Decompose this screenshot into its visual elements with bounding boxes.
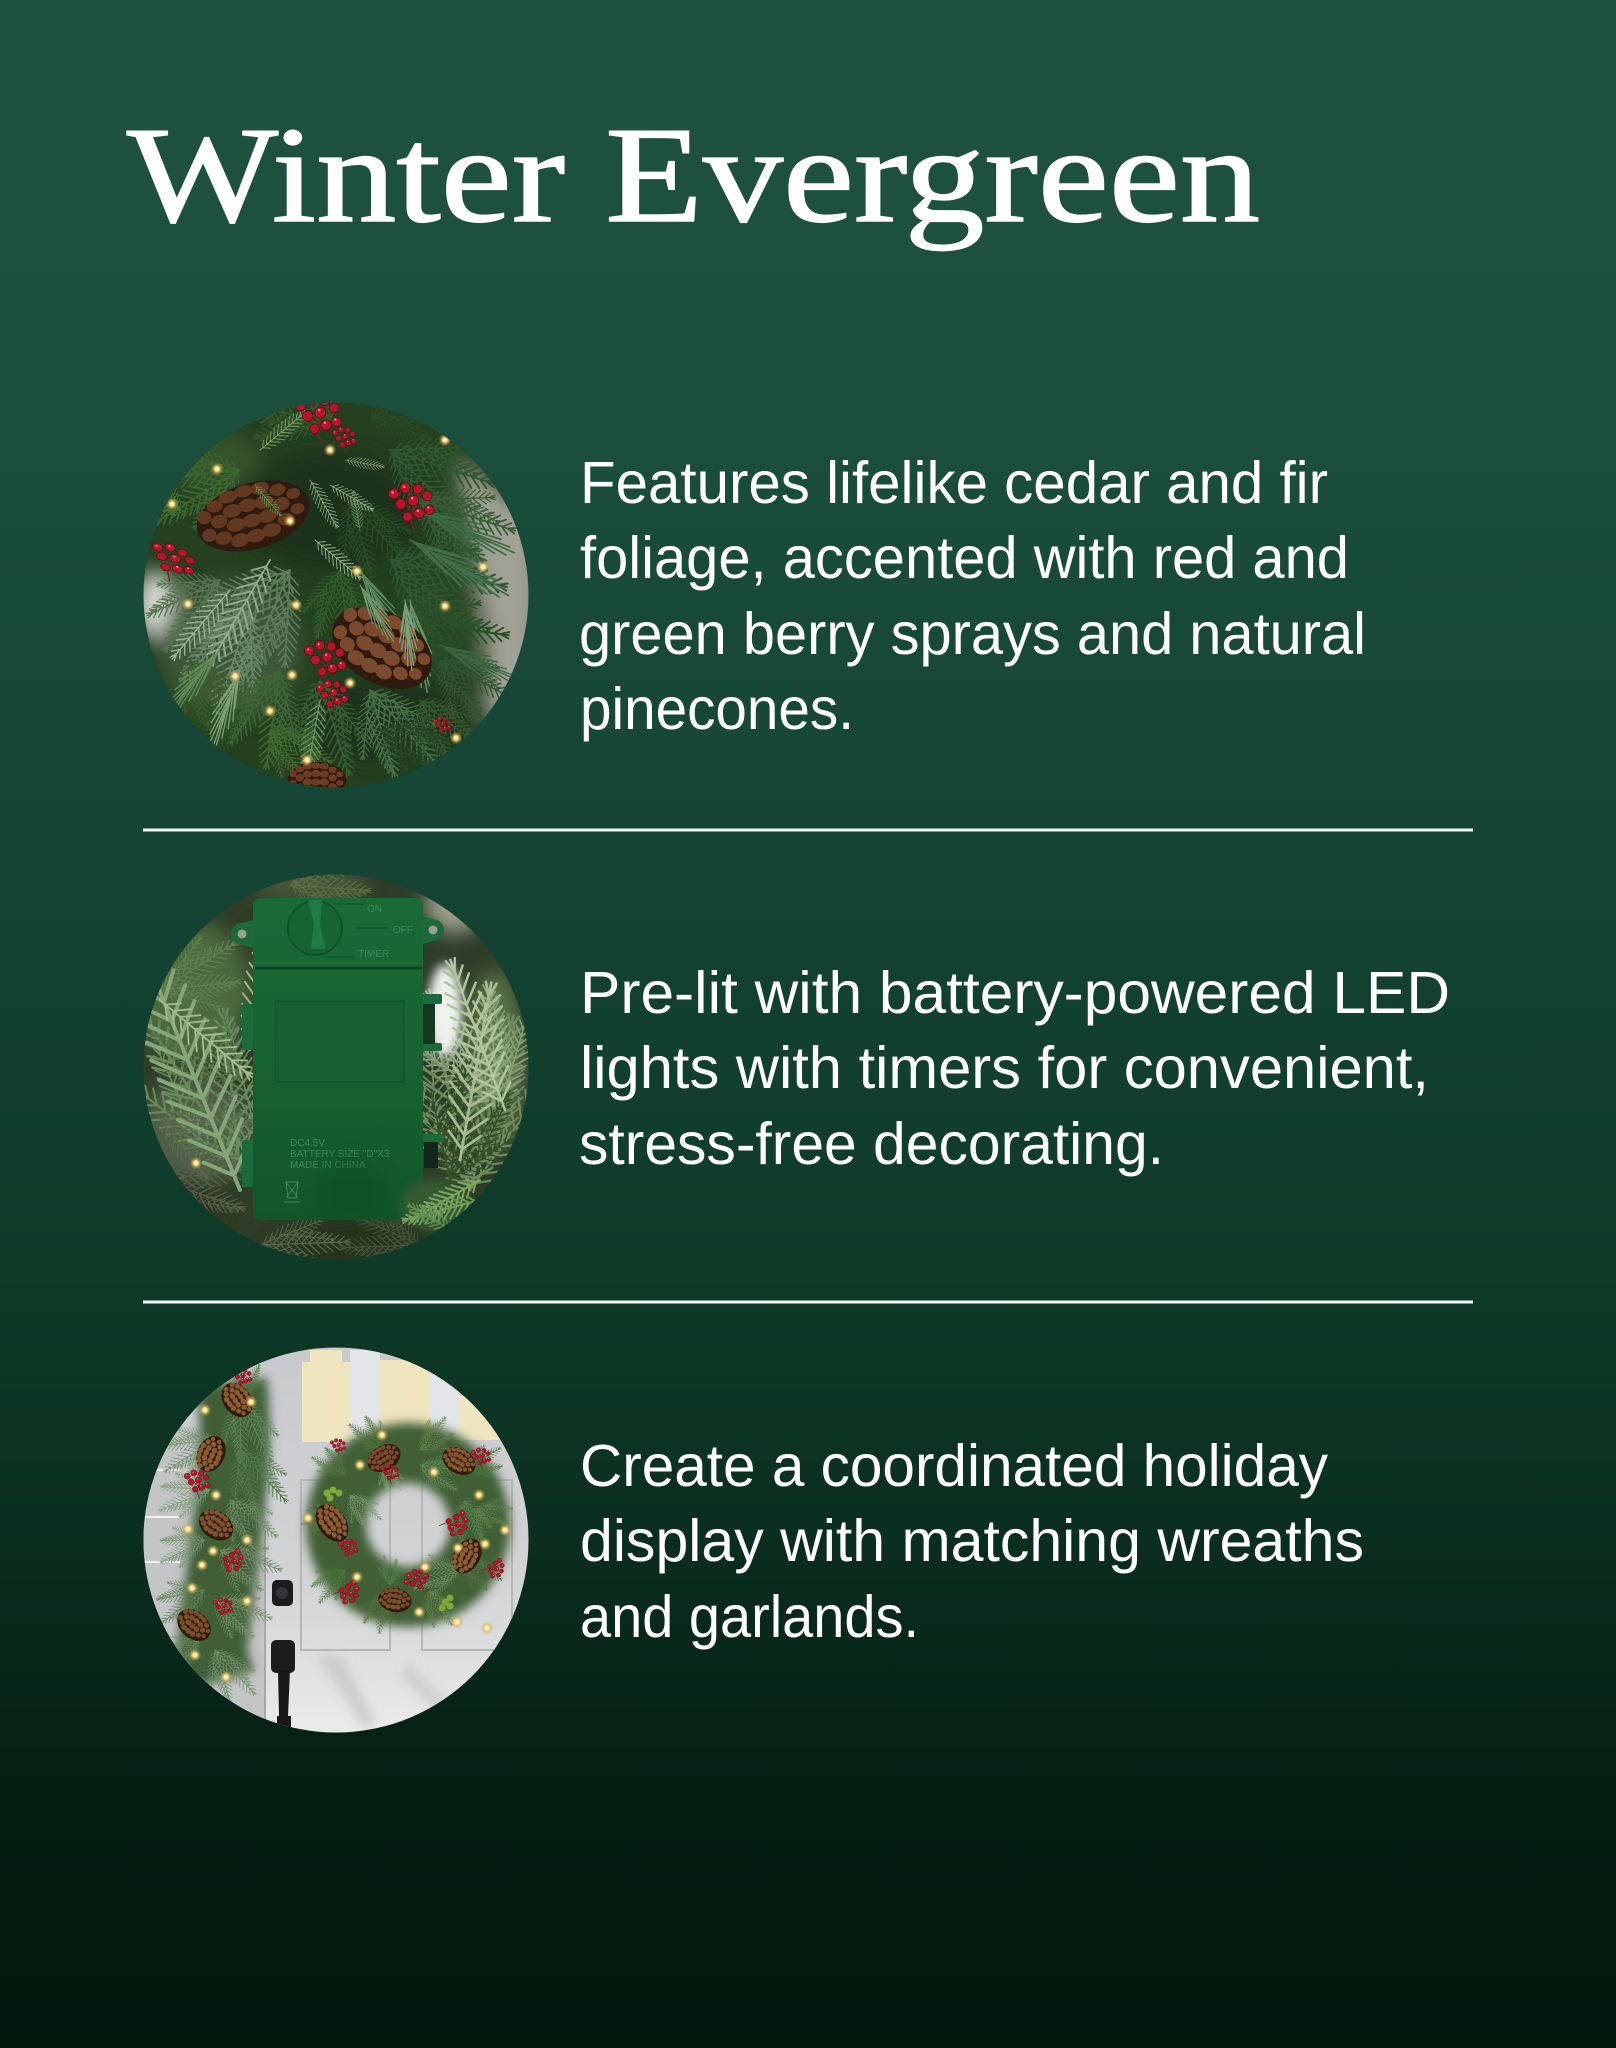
switch labels xyxy=(325,904,413,960)
pinecone bottom xyxy=(288,762,346,788)
side clips and screw ears xyxy=(231,914,444,1187)
divider 1 xyxy=(143,828,1473,832)
amber LED xyxy=(190,1157,202,1169)
text block 3: display with matching wreaths xyxy=(580,1508,1364,1574)
photo: battery box on foliage xyxy=(144,874,528,1260)
wreath shadow on door xyxy=(325,1655,460,1725)
text block 3: and garlands. xyxy=(580,1584,919,1650)
switch labels: TIMER xyxy=(358,949,389,960)
title: Winter Evergreen xyxy=(127,99,1260,251)
text block 3 xyxy=(580,1433,1364,1650)
recycling bin mark xyxy=(284,1182,300,1202)
cream window panes xyxy=(302,1350,500,1450)
divider 2 xyxy=(143,1300,1473,1304)
sprig over the box corner xyxy=(398,1176,481,1234)
text block 1: foliage, accented with red and xyxy=(580,525,1349,591)
moulded text: MADE IN CHINA xyxy=(290,1160,366,1171)
pinecone upper-left xyxy=(196,480,310,552)
text block 3: Create a coordinated holiday xyxy=(580,1433,1328,1499)
moulded text: BATTERY SIZE "D"X3 xyxy=(290,1149,390,1160)
timer dial xyxy=(288,900,342,955)
moulded text xyxy=(290,1139,389,1168)
text block 1: green berry sprays and natural xyxy=(579,601,1366,667)
foliage tufts xyxy=(97,827,567,1304)
text block 1 xyxy=(579,450,1366,742)
recessed label area xyxy=(275,1001,404,1082)
switch labels: OFF xyxy=(393,925,413,936)
text block 1: pinecones. xyxy=(580,676,854,742)
switch labels: ON xyxy=(367,904,382,915)
dense foliage tufts xyxy=(146,402,516,778)
door panels xyxy=(301,1480,512,1650)
garland xyxy=(156,1364,289,1702)
white background glimpse xyxy=(428,964,462,1056)
wreath xyxy=(300,1405,516,1639)
LED lights xyxy=(166,434,490,766)
text block 2: Pre-lit with battery-powered LED xyxy=(580,960,1450,1026)
text block 1: Features lifelike cedar and fir xyxy=(580,450,1328,516)
deadbolt and door handle xyxy=(271,1580,295,1730)
photo: wreath and garland on a front door xyxy=(140,1340,540,1750)
text block 2 xyxy=(579,960,1450,1177)
moulded text: DC4.5V xyxy=(290,1138,325,1149)
text block 2: lights with timers for convenient, xyxy=(580,1035,1429,1101)
photo: garland close-up with pinecones and berries xyxy=(144,402,528,788)
pinecone lower-right xyxy=(332,606,432,689)
text block 2: stress-free decorating. xyxy=(579,1111,1164,1177)
battery box xyxy=(231,898,444,1220)
left siding xyxy=(144,1430,265,1719)
berry clusters xyxy=(143,395,451,737)
